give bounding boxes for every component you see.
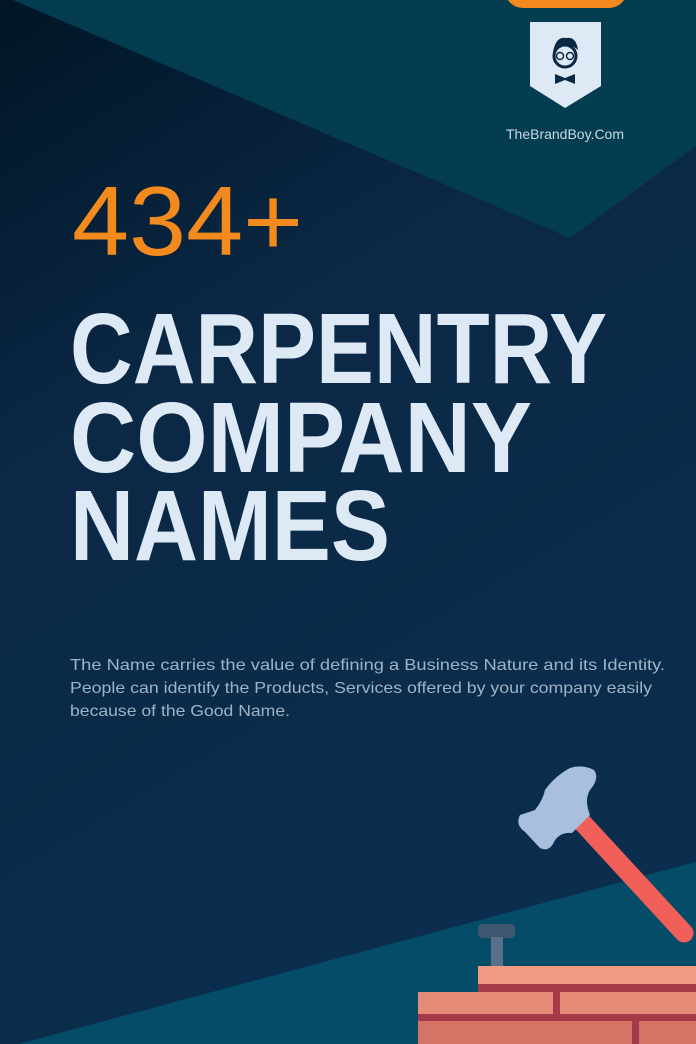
title — [70, 293, 607, 582]
number headline: 434+ — [72, 166, 303, 276]
title: CARPENTRY — [70, 293, 607, 405]
description paragraph: because of the Good Name. — [70, 703, 290, 720]
icon: nail — [478, 924, 515, 967]
orange pill — [505, 0, 627, 8]
title: NAMES — [70, 470, 390, 582]
logo: shield with boy — [530, 22, 601, 108]
description paragraph — [70, 657, 665, 720]
top teal banner — [13, 0, 696, 238]
title: COMPANY — [70, 382, 532, 494]
icon: hammer — [518, 766, 684, 933]
icon: bricks — [418, 966, 696, 1044]
description paragraph: People can identify the Products, Services offered by your company easily — [70, 680, 652, 697]
description paragraph: The Name carries the value of defining a Business Nature and its Identity. — [70, 657, 665, 674]
bottom teal ground — [0, 862, 696, 1044]
brand text: TheBrandBoy.Com — [506, 126, 624, 142]
